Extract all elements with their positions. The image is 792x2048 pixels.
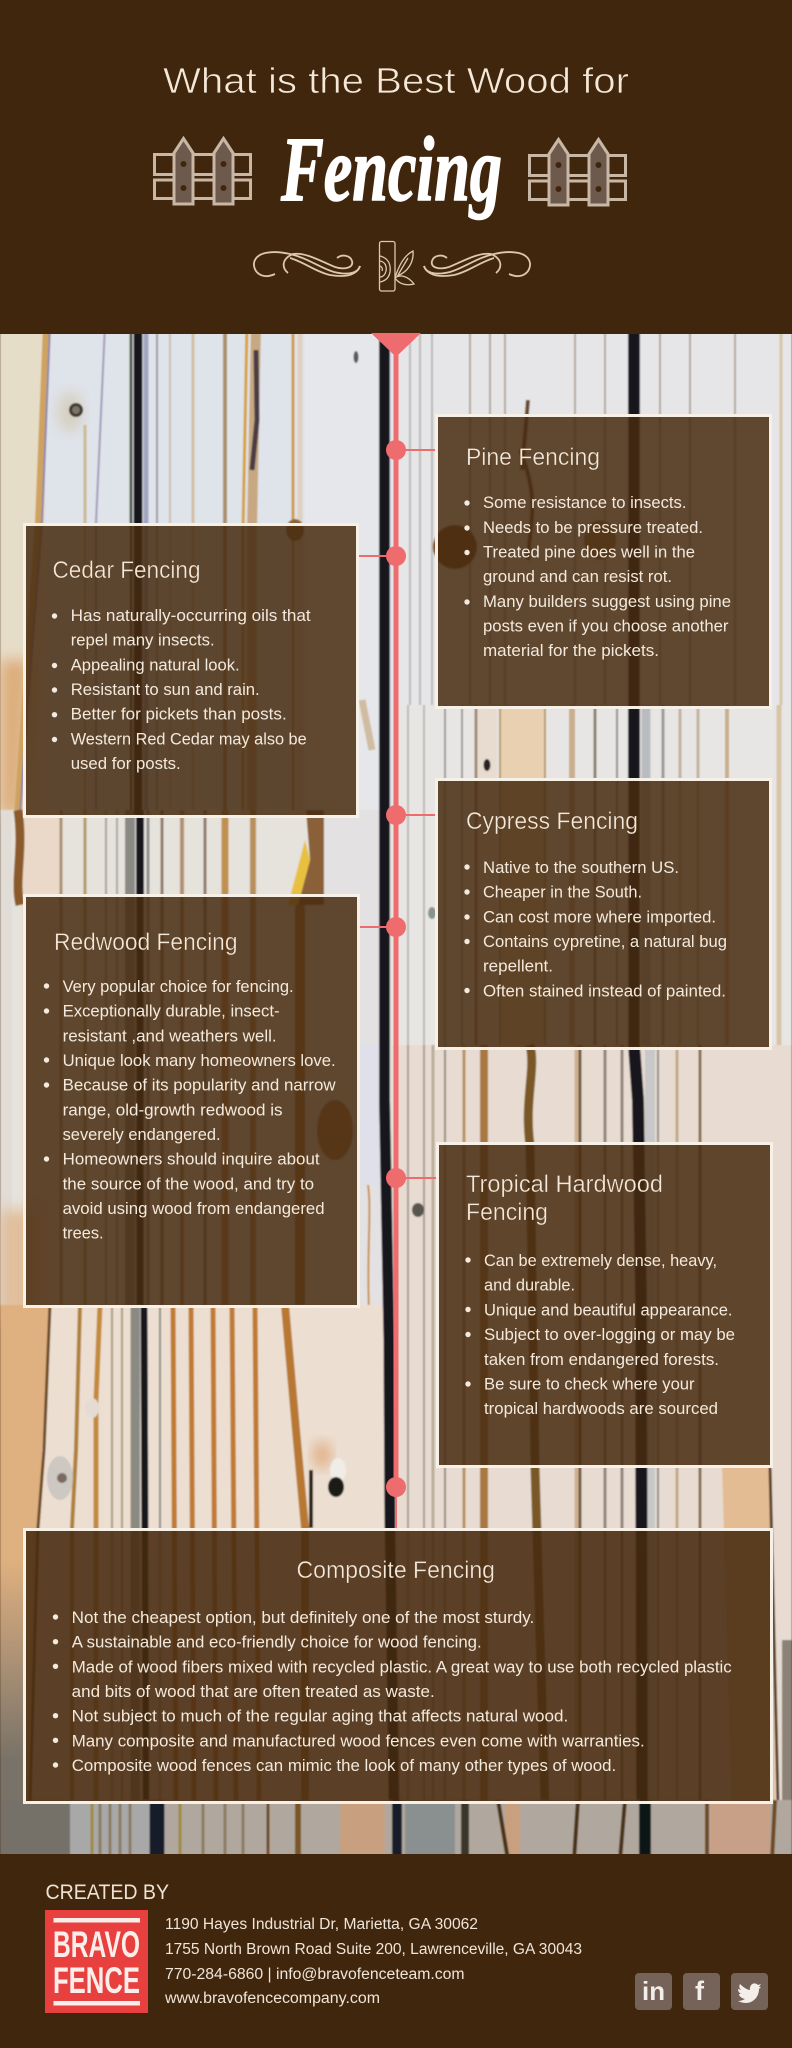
dark plank gaps <box>138 325 642 1805</box>
list: cypress: Native to the southern US. <box>483 858 679 877</box>
icon: log with leaves <box>380 242 414 291</box>
list: redwood: Homeowners should inquire about <box>63 1150 320 1169</box>
timeline node: cedar <box>358 546 406 566</box>
list: cedar: used for posts. <box>71 754 181 773</box>
list: redwood: Unique look many homeowners love. <box>63 1051 336 1070</box>
list: pine: material for the pickets. <box>483 641 659 660</box>
contact details <box>164 1916 582 2007</box>
icon: right flourish <box>424 252 530 276</box>
footer <box>0 1854 792 2048</box>
logo: Bravo Fence: FENCE <box>53 1959 140 2001</box>
list: cedar: Western Red Cedar may also be <box>71 729 307 748</box>
title script word: Fencing <box>280 118 502 220</box>
contact details: 1755 North Brown Road Suite 200, Lawrenceville, GA 30043 <box>165 1941 582 1958</box>
list: tropical hardwood: Unique and beautiful appearance. <box>484 1300 732 1319</box>
lower left planks <box>0 1210 392 1805</box>
icon: linkedin <box>635 1973 672 2010</box>
heading: tropical hardwood <box>466 1171 663 1226</box>
wood knots <box>47 351 490 1500</box>
list: redwood: range, old-growth redwood is <box>63 1100 283 1119</box>
list: pine: Needs to be pressure treated. <box>483 518 703 537</box>
list: pine: Some resistance to insects. <box>483 493 686 512</box>
list: composite: and bits of wood that are often treated as waste. <box>72 1682 435 1701</box>
list: tropical hardwood: taken from endangered forests. <box>484 1350 719 1369</box>
list: tropical hardwood: tropical hardwoods are sourced <box>484 1399 718 1418</box>
middle right planks <box>362 700 792 1050</box>
icon: facebook: f <box>695 1976 705 2006</box>
icon: fence right <box>530 140 626 205</box>
heading: cypress: Cypress Fencing <box>466 808 638 835</box>
header band <box>0 0 792 334</box>
icon: fence left <box>154 138 250 204</box>
list: composite: Made of wood fibers mixed with recycled plastic. A great way to use both recycled plastic <box>72 1657 732 1676</box>
list: cedar <box>52 606 311 773</box>
logo: Bravo Fence <box>45 1910 148 2013</box>
wood plank background <box>0 325 792 1860</box>
timeline node: redwood <box>359 917 406 937</box>
timeline node: pine <box>386 440 437 460</box>
dimmed bottom strip of the photo <box>0 1800 792 1860</box>
panel: redwood fencing <box>24 896 358 1306</box>
list: redwood: avoid using wood from endangered <box>63 1199 325 1218</box>
list: tropical hardwood <box>465 1251 735 1418</box>
list: redwood: Very popular choice for fencing. <box>63 977 294 996</box>
logo: Bravo Fence: BRAVO <box>53 1923 140 1965</box>
upper right planks <box>392 325 792 710</box>
list: pine: Treated pine does well in the <box>483 542 695 562</box>
list: composite: Not subject to much of the regular aging that affects natural wood. <box>72 1707 568 1726</box>
list: tropical hardwood: and durable. <box>484 1276 575 1295</box>
heading: tropical hardwood: Fencing <box>466 1199 548 1226</box>
contact details: 1190 Hayes Industrial Dr, Marietta, GA 30062 <box>165 1916 478 1933</box>
list: cedar: Has naturally-occurring oils that <box>71 606 311 625</box>
list: cypress <box>464 858 727 1000</box>
panel: tropical hardwood fencing <box>438 1144 772 1466</box>
icon: facebook <box>683 1973 720 2010</box>
icon: twitter <box>731 1973 768 2010</box>
list: pine: Many builders suggest using pine <box>483 592 731 611</box>
contact details: 770-284-6860 | info@bravofenceteam.com <box>165 1966 465 1983</box>
heading: tropical hardwood: Tropical Hardwood <box>466 1171 663 1198</box>
list: composite <box>53 1608 732 1775</box>
list: composite: Composite wood fences can mimic the look of many other types of wood. <box>72 1756 616 1775</box>
timeline arrow <box>371 333 421 356</box>
list: redwood: Because of its popularity and narrow <box>63 1076 336 1095</box>
list: cypress: repellent. <box>483 957 553 976</box>
contact details: www.bravofencecompany.com <box>164 1990 380 2007</box>
list: tropical hardwood: Can be extremely dense, heavy, <box>484 1251 717 1270</box>
timeline node: cypress <box>386 805 437 825</box>
timeline node: composite <box>386 1477 406 1497</box>
heading: cedar: Cedar Fencing <box>52 557 200 584</box>
timeline <box>358 333 437 1529</box>
list: redwood: trees. <box>63 1224 104 1243</box>
heading: composite: Composite Fencing <box>296 1557 495 1584</box>
icon: left flourish <box>254 252 360 276</box>
panel: cedar fencing <box>24 524 358 816</box>
list: cedar: repel many insects. <box>71 631 215 650</box>
heading: redwood: Redwood Fencing <box>54 929 238 956</box>
list: composite: Many composite and manufactured wood fences even come with warranties. <box>72 1731 645 1750</box>
list: redwood: Exceptionally durable, insect- <box>63 1002 280 1021</box>
middle left planks <box>0 810 392 1310</box>
panel: cypress fencing <box>436 780 770 1048</box>
list: cypress: Often stained instead of painted. <box>483 981 726 1000</box>
lower right planks <box>360 1045 792 1805</box>
list: cedar: Better for pickets than posts. <box>71 705 287 724</box>
list: composite: Not the cheapest option, but definitely one of the most sturdy. <box>72 1608 534 1627</box>
list: redwood: resistant ,and weathers well. <box>63 1026 277 1045</box>
panel: pine fencing <box>436 416 770 708</box>
list: cedar: Resistant to sun and rain. <box>71 680 260 699</box>
list: redwood: severely endangered. <box>63 1125 221 1144</box>
timeline node: tropical <box>386 1168 437 1188</box>
list: pine: ground and can resist rot. <box>483 567 672 586</box>
list: pine <box>464 493 731 660</box>
heading: pine: Pine Fencing <box>466 444 600 471</box>
created by label: CREATED BY <box>46 1881 169 1904</box>
list: redwood <box>44 977 336 1243</box>
panel: composite fencing <box>24 1530 772 1802</box>
list: cypress: Cheaper in the South. <box>483 883 642 902</box>
list: pine: posts even if you choose another <box>483 616 729 636</box>
list: cypress: Contains cypretine, a natural bug <box>483 932 727 951</box>
title line: What is the Best Wood for <box>163 60 629 101</box>
list: tropical hardwood: Subject to over-logging or may be <box>484 1325 735 1344</box>
list: redwood: the source of the wood, and try to <box>63 1174 314 1193</box>
upper left planks <box>0 325 392 815</box>
list: tropical hardwood: Be sure to check where your <box>484 1374 695 1394</box>
list: cedar: Appealing natural look. <box>71 655 240 674</box>
icon: linkedin: in <box>642 1976 665 2006</box>
list: composite: A sustainable and eco-friendly choice for wood fencing. <box>72 1633 482 1652</box>
list: cypress: Can cost more where imported. <box>483 907 716 926</box>
